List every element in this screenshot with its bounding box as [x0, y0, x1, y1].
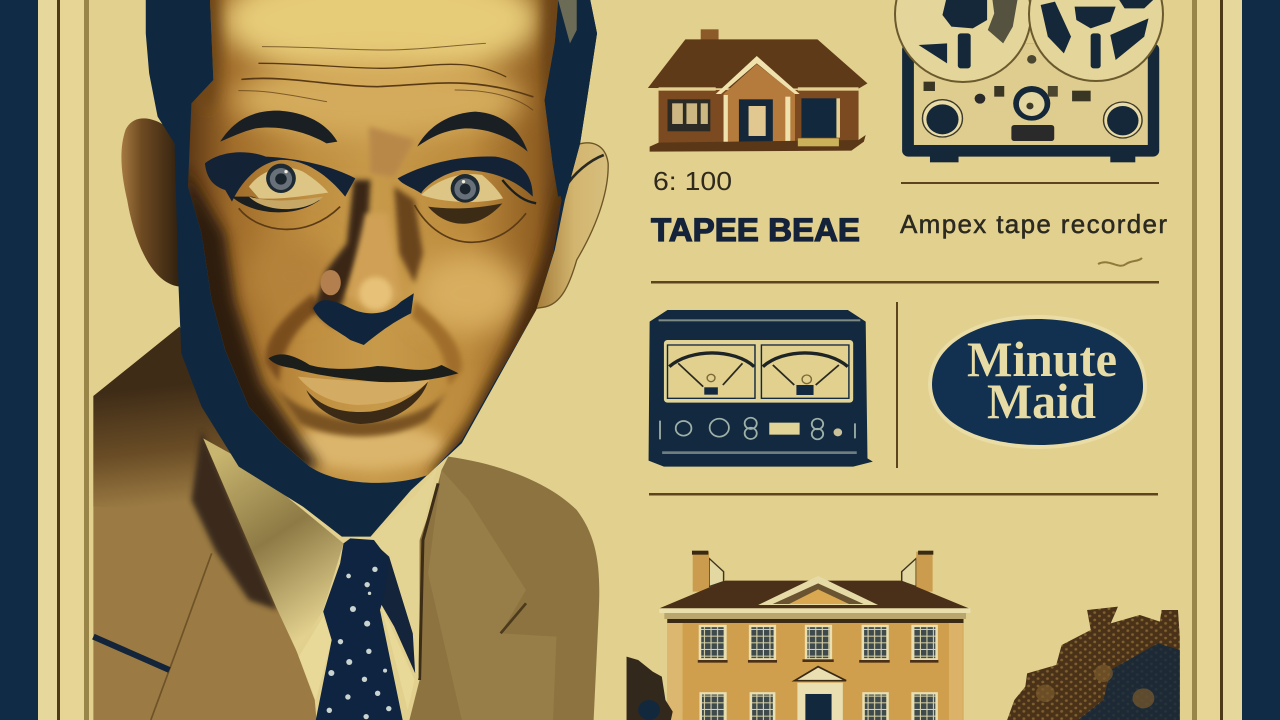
icon: reel-to-reel tape recorder	[895, 0, 1163, 162]
lapel line	[151, 553, 212, 720]
text: product name: TAPEE BEAE	[651, 212, 860, 248]
text: price: 6: 100	[653, 166, 732, 196]
logo: Minute Maid	[928, 315, 1147, 449]
right iris	[451, 174, 480, 203]
logo: Minute Maid: Minute	[967, 331, 1117, 387]
nose bridge	[369, 127, 414, 177]
lower lip	[298, 377, 430, 405]
hair and neck shadow	[146, 0, 597, 537]
nose side shadows	[313, 180, 371, 327]
divider: middle	[651, 281, 1159, 284]
right eye bag	[428, 203, 502, 224]
illustration: right tree	[1007, 607, 1180, 720]
soft face shading	[185, 0, 573, 483]
smile folds	[265, 293, 320, 383]
tie shadow	[371, 540, 415, 673]
head	[121, 0, 608, 537]
divider: under recorder	[901, 182, 1159, 184]
lower face shade	[278, 390, 446, 440]
neck shade on jacket	[191, 430, 278, 610]
divider: vertical	[896, 302, 898, 468]
logo: Minute Maid: Maid	[987, 373, 1096, 429]
nostril highlight	[321, 270, 341, 295]
suit and shirt	[93, 327, 599, 720]
left cheek	[300, 250, 329, 296]
portrait: man in suit	[93, 0, 608, 720]
text: recorder caption: Ampex tape recorder	[900, 209, 1167, 239]
right frame lines	[1192, 0, 1242, 720]
left shoulder shade	[93, 327, 259, 540]
left eye white	[249, 168, 328, 199]
right ear	[536, 143, 608, 308]
left eye bag	[232, 197, 320, 212]
illustration: colonial mansion	[659, 551, 970, 720]
left reel	[895, 0, 1031, 82]
pocket slit	[93, 637, 169, 670]
right reel	[1029, 0, 1163, 81]
right navy band	[1242, 0, 1280, 720]
right hair	[545, 0, 597, 197]
right ear fold	[565, 155, 604, 188]
right lapel seam	[501, 603, 526, 633]
divider: lower	[649, 493, 1158, 496]
left collar	[203, 438, 344, 652]
right cheek light	[414, 253, 523, 333]
right jacket	[409, 457, 599, 720]
icon: VU meter amplifier	[649, 310, 873, 467]
left ear	[121, 118, 180, 287]
forehead glow	[222, 0, 540, 77]
forehead wrinkles	[239, 43, 533, 110]
tie	[316, 538, 403, 720]
right collar	[371, 468, 436, 680]
icon: house	[648, 29, 867, 152]
illustration: left tree	[627, 657, 673, 720]
right eye socket	[398, 156, 533, 197]
icon: small plant mark	[1098, 258, 1142, 266]
top corner dark	[194, 0, 219, 110]
tie dots	[327, 567, 391, 719]
cheek edge dark right	[428, 173, 570, 477]
right lapel highlight	[428, 470, 556, 720]
right eyebrow	[417, 112, 528, 152]
shirt under collar	[299, 617, 332, 700]
nose shadow	[313, 293, 414, 345]
skin	[188, 0, 562, 483]
left frame lines	[38, 0, 89, 720]
left navy band	[0, 0, 38, 720]
left jacket	[93, 327, 316, 720]
left eyebrow	[220, 111, 337, 143]
cheek edge dark left	[185, 167, 320, 483]
chin light	[289, 423, 445, 470]
left iris	[266, 164, 296, 193]
right eye white	[421, 174, 503, 202]
left eye socket	[205, 152, 355, 202]
mouth	[268, 354, 458, 383]
